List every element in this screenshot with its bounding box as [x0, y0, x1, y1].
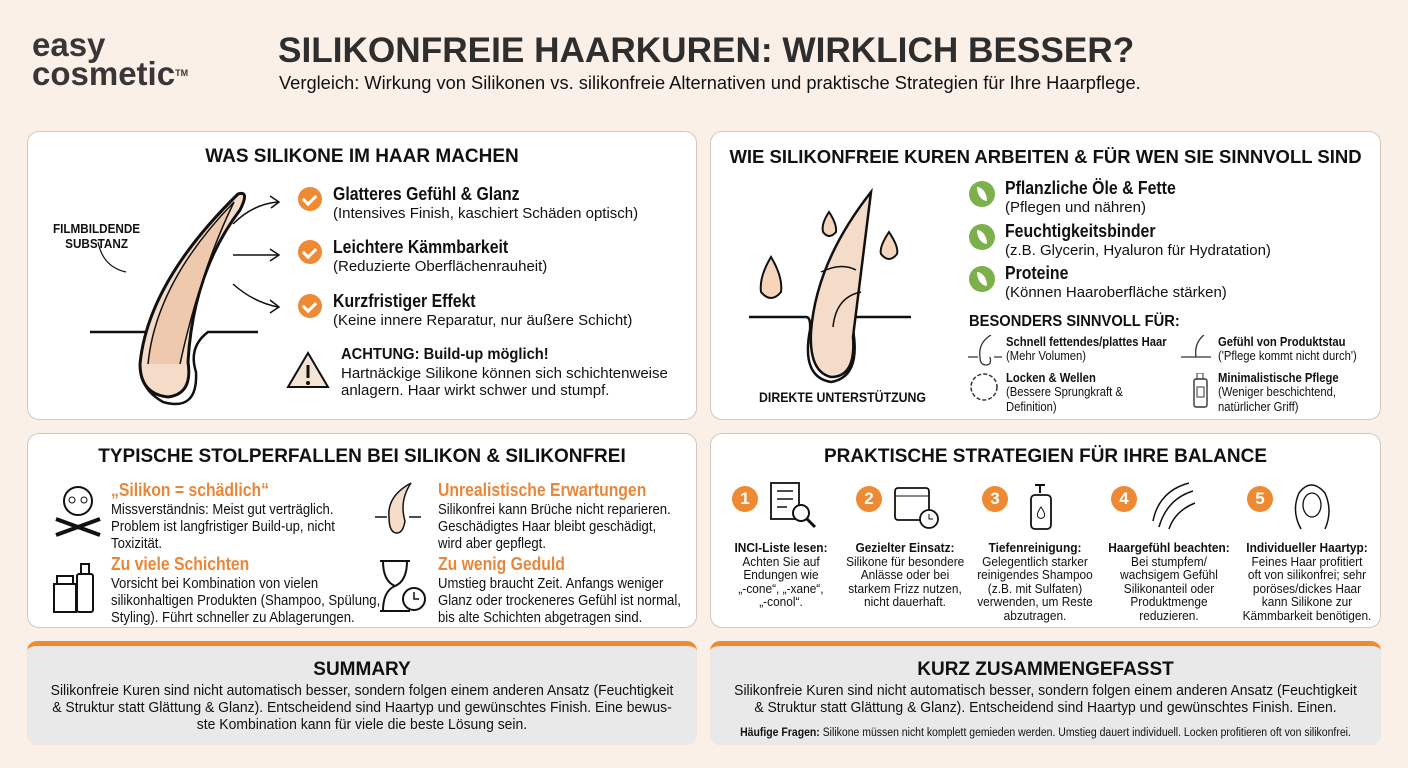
step 4: Bei stumpfem/ [1131, 554, 1207, 568]
step 1 [732, 482, 828, 609]
step 3: Gelegentlich starker [982, 554, 1088, 568]
step 4: Silikonanteil oder [1124, 582, 1214, 596]
target list [968, 335, 1357, 414]
pitfall 2: Geschädigtes Haar bleibt geschädigt, [438, 518, 656, 535]
icon: skull [55, 486, 101, 537]
pitfall 2: Silikonfrei kann Brüche nicht reparieren. [438, 501, 671, 518]
target list: Gefühl von Produktstau [1218, 335, 1346, 349]
pitfall 4: bis alte Schichten abgetragen sind. [438, 609, 642, 626]
item: proteine [969, 263, 1227, 301]
icon: products [53, 563, 94, 613]
logo: cosmeticTM [32, 55, 188, 92]
step 5: Individueller Haartyp: [1246, 541, 1368, 555]
panel: was silikone im haar machen [27, 131, 697, 420]
step 4: wachsigem Gefühl [1120, 568, 1218, 582]
text [51, 682, 674, 733]
text: Silikonfreie Kuren sind nicht automatisch besser, sondern folgen einem anderen Ansatz (Feuchtigkeit [51, 682, 673, 699]
hair illustration with drops [749, 188, 911, 384]
step 1: Achten Sie auf [742, 554, 820, 568]
pitfall 1: „Silikon = schädlich“ [111, 480, 269, 500]
target list: (Bessere Sprungkraft & [1006, 385, 1123, 399]
step 5: poröses/dickes Haar [1253, 582, 1361, 596]
step 3: 3 [990, 489, 1000, 508]
step 5 [1243, 484, 1371, 622]
step 5: 5 [1255, 489, 1265, 508]
text: ste Kombination kann für viele die beste Lösung sein. [197, 716, 527, 733]
step 1: „-cone“, „-xane“, [738, 582, 824, 596]
step 1: INCI-Liste lesen: [734, 541, 828, 555]
panel: praktische strategien [710, 433, 1381, 628]
icon: hair [375, 482, 421, 534]
item: kurzfristig [298, 291, 632, 329]
pitfall 4: Glanz oder trockeneres Gefühl ist normal, [438, 592, 681, 609]
step 1: „-conol“. [759, 595, 803, 609]
heading: WAS SILIKONE IM HAAR MACHEN [205, 146, 519, 167]
text: Silikonfreie Kuren sind nicht automatisch besser, sondern folgen einem anderen Ansatz (Feuchtigkeit [734, 682, 1357, 699]
label: filmbildende substanz: FILMBILDENDE [53, 221, 140, 236]
pitfall 1: Toxizität. [111, 535, 162, 552]
target list: Schnell fettendes/plattes Haar [1006, 335, 1167, 349]
item: kämmbarkeit: Leichtere Kämmbarkeit [333, 237, 508, 257]
step 3: (z.B. mit Sulfaten) [988, 582, 1082, 596]
step 2: starkem Frizz nutzen, [848, 582, 962, 596]
summary left [27, 641, 697, 745]
step 4: Produktmenge [1130, 595, 1208, 609]
heading: TYPISCHE STOLPERFALLEN BEI SILIKON & SILIKONFREI [98, 446, 626, 467]
item: öle [969, 178, 1176, 216]
target list: Locken & Wellen [1006, 371, 1096, 385]
step 5: oft von silikonfrei; sehr [1248, 568, 1366, 582]
warning: ACHTUNG: Build-up möglich! [341, 346, 549, 363]
item: glanz [298, 184, 638, 222]
step 2: nicht dauerhaft. [864, 595, 946, 609]
panel: silikonfreie kuren [710, 131, 1381, 420]
pitfall 2 [438, 480, 671, 552]
faq: Häufige Fragen: Silikone müssen nicht komplett gemieden werden. Umstieg dauert individuell. Locken profitieren oft von silikonfrei. [740, 727, 1351, 739]
item: feuchtigkeitsbinder: (z.B. Glycerin, Hyaluron für Hydratation) [1005, 242, 1271, 259]
pitfall 4 [438, 554, 681, 626]
text: & Struktur statt Glättung & Glanz). Entscheidend sind Haartyp und gewünschtes Finish. Eine bewus- [52, 699, 672, 716]
panel: stolperfallen [27, 433, 697, 628]
warning: anlagern. Haar wirkt schwer und stumpf. [341, 382, 609, 399]
step 4 [1108, 482, 1230, 622]
pitfall 2: wird aber gepflegt. [438, 535, 546, 552]
target list: (Mehr Volumen) [1006, 349, 1086, 363]
step 5: Kämmbarkeit benötigen. [1243, 608, 1371, 622]
item: proteine: Proteine [1005, 263, 1068, 283]
item: öle: (Pflegen und nähren) [1005, 199, 1146, 216]
pitfall 1 [111, 480, 335, 552]
target list: ('Pflege kommt nicht durch') [1218, 349, 1357, 363]
item: kurzfristig: (Keine innere Reparatur, nur äußere Schicht) [333, 312, 632, 329]
step 1: Endungen wie [743, 568, 819, 582]
pitfall 2: Unrealistische Erwartungen [438, 480, 646, 500]
target list: Definition) [1006, 400, 1057, 414]
step 1: 1 [740, 489, 750, 508]
item: feuchtigkeitsbinder: Feuchtigkeitsbinder [1005, 221, 1156, 241]
item: glanz: (Intensives Finish, kaschiert Schäden optisch) [333, 205, 638, 222]
step 3: Tiefenreinigung: [989, 541, 1081, 555]
label: filmbildende substanz [53, 221, 140, 251]
pitfall 4: Zu wenig Geduld [438, 554, 565, 574]
heading: PRAKTISCHE STRATEGIEN FÜR IHRE BALANCE [824, 446, 1267, 467]
pitfall 4: Umstieg braucht Zeit. Anfangs weniger [438, 575, 663, 592]
step 2: Gezielter Einsatz: [855, 541, 954, 555]
icon: hourglass [380, 560, 426, 612]
step 5: Feines Haar profitiert [1252, 554, 1362, 568]
summary right [710, 641, 1381, 745]
pitfall 3: Styling). Führt schneller zu Ablagerungen. [111, 609, 355, 626]
item: kämmbarkeit [298, 237, 547, 275]
step 2: Anlässe oder bei [861, 568, 949, 582]
step 2: Silikone für besondere [846, 554, 964, 568]
item: kurzfristig: Kurzfristiger Effekt [333, 291, 476, 311]
text [734, 682, 1357, 716]
step 3: verwenden, um Reste [977, 595, 1093, 609]
step 2 [846, 486, 964, 609]
heading: KURZ ZUSAMMENGEFASST [917, 659, 1174, 680]
pitfall 3 [111, 554, 380, 626]
label: direkte unterstützung: DIREKTE UNTERSTÜTZUNG [759, 389, 926, 405]
item: kämmbarkeit: (Reduzierte Oberflächenrauheit) [333, 258, 547, 275]
target list: Minimalistische Pflege [1218, 371, 1339, 385]
item: glanz: Glatteres Gefühl & Glanz [333, 184, 520, 204]
title: SILIKONFREIE HAARKUREN: WIRKLICH BESSER? [278, 31, 1134, 70]
logo: easy [32, 26, 105, 63]
step 5: kann Silikone zur [1262, 595, 1352, 609]
hair illustration [90, 192, 280, 406]
warning: Hartnäckige Silikone können sich schichtenweise [341, 365, 668, 382]
heading: WIE SILIKONFREIE KUREN ARBEITEN & FÜR WEN SIE SINNVOLL SIND [729, 146, 1362, 167]
item: feuchtigkeitsbinder [969, 221, 1271, 259]
label: filmbildende substanz: SUBSTANZ [65, 236, 128, 251]
target list: (Weniger beschichtend, [1218, 385, 1336, 399]
target list: natürlicher Griff) [1218, 400, 1298, 414]
heading: SUMMARY [313, 659, 411, 680]
step 4: reduzieren. [1139, 608, 1199, 622]
step 4: 4 [1119, 489, 1129, 508]
warning [286, 346, 668, 399]
pitfall 3: silikonhaltigen Produkten (Shampoo, Spülung, [111, 592, 380, 609]
step 2: 2 [864, 489, 874, 508]
step 3: abzutragen. [1004, 608, 1066, 622]
besonders sinnvoll: BESONDERS SINNVOLL FÜR: [969, 313, 1180, 330]
text: & Struktur statt Glättung & Glanz). Entscheidend sind Haartyp und gewünschtes Finish. Einen. [754, 699, 1337, 716]
pitfall 1: Missverständnis: Meist gut verträglich. [111, 501, 333, 518]
pitfall 3: Zu viele Schichten [111, 554, 249, 574]
step 4: Haargefühl beachten: [1108, 541, 1230, 555]
item: proteine: (Können Haaroberfläche stärken) [1005, 284, 1227, 301]
subtitle: Vergleich: Wirkung von Silikonen vs. silikonfreie Alternativen und praktische Strategien für Ihre Haarpflege. [279, 72, 1141, 93]
pitfall 3: Vorsicht bei Kombination von vielen [111, 575, 318, 592]
pitfall 1: Problem ist langfristiger Build-up, nicht [111, 518, 335, 535]
step 3 [977, 484, 1093, 622]
item: öle: Pflanzliche Öle & Fette [1005, 178, 1176, 198]
logo [32, 26, 188, 92]
step 3: reinigendes Shampoo [977, 568, 1093, 582]
